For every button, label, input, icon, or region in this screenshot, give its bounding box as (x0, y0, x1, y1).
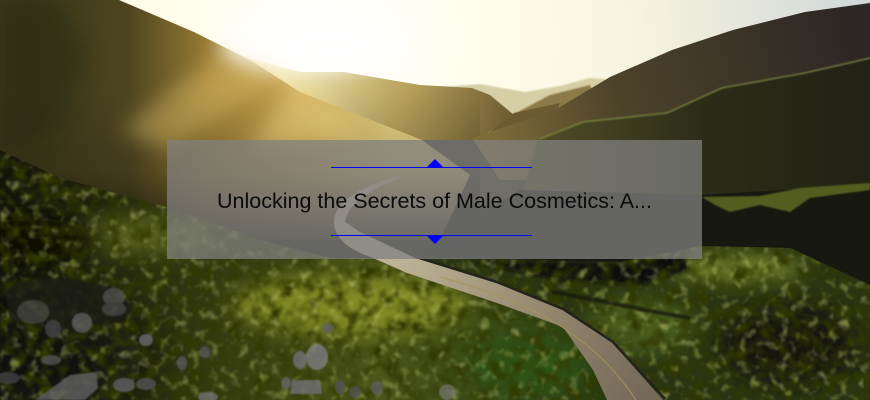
right mountain (472, 3, 870, 180)
dark band across the right side (413, 185, 870, 285)
left mountain (0, 0, 470, 240)
dark shade on left mountain (0, 0, 90, 150)
central sunlit ridge (235, 55, 514, 150)
right foreground slope (413, 246, 870, 400)
dark base behind lower valley (0, 140, 870, 400)
right lit band (702, 183, 870, 212)
dark fade on the base of the left mountain (0, 90, 480, 240)
top divider line (331, 167, 532, 168)
bottom triangle ornament (427, 236, 443, 244)
left foreground hillside (0, 150, 607, 400)
top triangle ornament (427, 159, 443, 167)
right lower ridge (520, 60, 870, 270)
sun rays over left mountain (120, 40, 360, 150)
ridge highlight (540, 58, 870, 139)
channel beside road (552, 292, 690, 318)
valley floor behind the panel (415, 140, 560, 205)
sun glow bleeding over ridges (220, 17, 400, 73)
boulders (0, 278, 455, 400)
bottom divider line (331, 235, 532, 236)
title text: Unlocking the Secrets of Male Cosmetics: A... (217, 189, 652, 213)
winding road (334, 176, 665, 400)
title panel (167, 140, 702, 259)
distant hills (430, 78, 606, 147)
